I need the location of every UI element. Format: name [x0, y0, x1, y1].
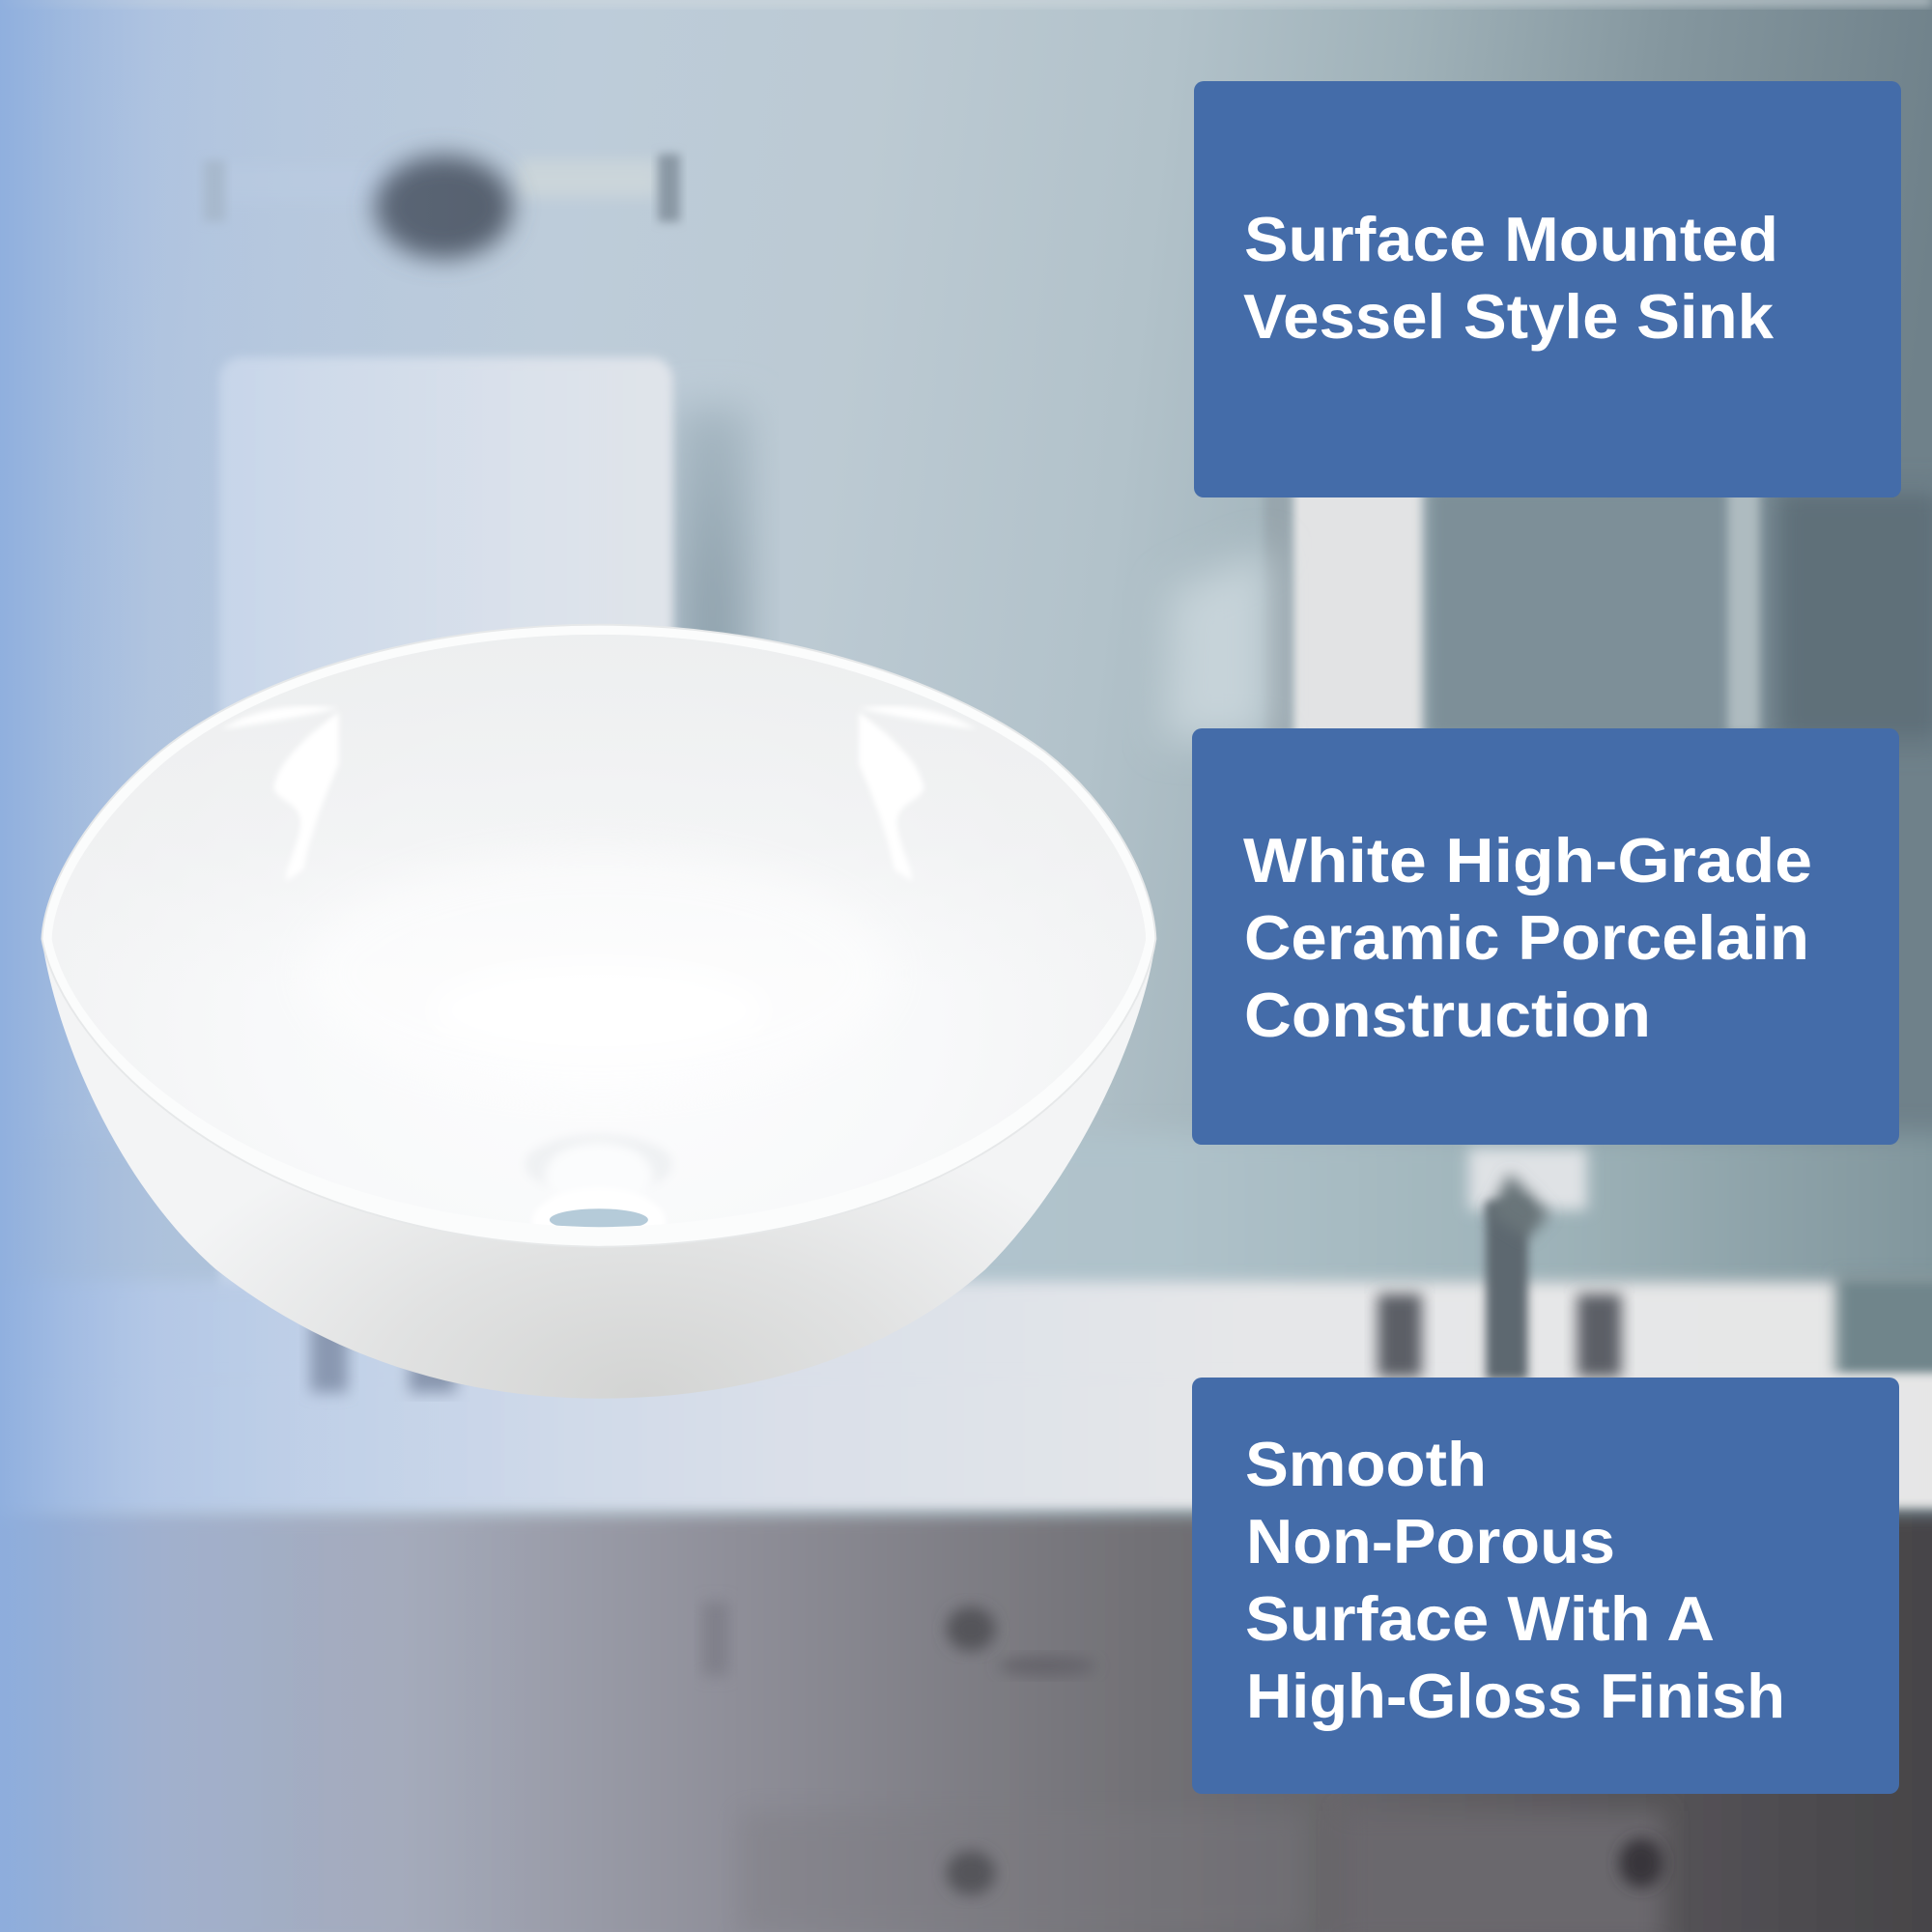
panel: ceramic construction	[1192, 728, 1899, 1145]
drain surround	[529, 1140, 668, 1177]
heading: ceramic construction: Construction	[1244, 980, 1651, 1050]
soft basin glow	[303, 850, 895, 1096]
heading: smooth surface	[1245, 1429, 1785, 1731]
sink rim	[42, 625, 1155, 1247]
heading: ceramic construction	[1243, 825, 1812, 1050]
central glare	[433, 966, 765, 1055]
drain hole	[549, 1208, 648, 1227]
left reflection	[273, 712, 339, 881]
heading: ceramic construction: Ceramic Porcelain	[1244, 902, 1809, 973]
heading: smooth surface: Non-Porous	[1246, 1506, 1615, 1577]
heading: surface mounted: Vessel Style Sink	[1243, 281, 1775, 352]
panel: surface mounted	[1194, 81, 1901, 497]
heading: surface mounted	[1243, 204, 1778, 352]
upper basin shading	[37, 629, 1158, 985]
panel: smooth surface	[1192, 1378, 1899, 1794]
right reflection	[859, 712, 924, 881]
heading: ceramic construction: White High-Grade	[1243, 825, 1812, 895]
heading: smooth surface: High-Gloss Finish	[1246, 1661, 1785, 1731]
heading: smooth surface: Surface With A	[1245, 1583, 1715, 1654]
heading: smooth surface: Smooth	[1245, 1429, 1487, 1499]
heading: surface mounted: Surface Mounted	[1244, 204, 1778, 274]
vessel sink bowl	[37, 616, 1158, 1399]
sink outer body	[42, 625, 1155, 1399]
sink interior	[37, 616, 1158, 1257]
